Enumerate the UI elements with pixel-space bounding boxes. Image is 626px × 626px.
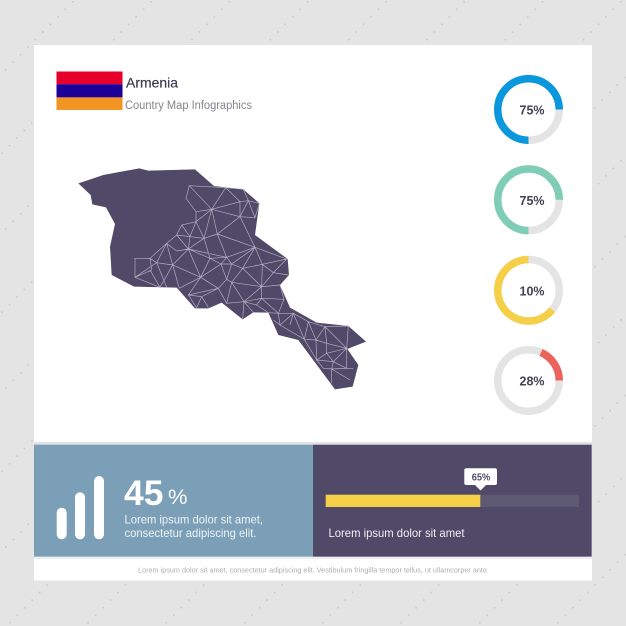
text: blue panel description: Lorem ipsum dolor sit amet,	[124, 512, 263, 526]
panel: white card	[34, 45, 592, 580]
donut: 75% blue	[498, 79, 559, 140]
panel: purple progress	[313, 445, 592, 557]
panel: blue statistic	[34, 445, 313, 557]
donut: 75% blue: 75%	[520, 102, 545, 118]
icon: bar chart	[57, 476, 104, 539]
footer text: Lorem ipsum dolor sit amet, consectetur adipiscing elit. Vestibulum fringilla tempor tellus, ut ullamcorper ante	[138, 565, 487, 574]
subtitle: Country Map Infographics	[125, 100, 252, 112]
text: blue panel description	[124, 512, 263, 540]
callout: 65%	[464, 468, 497, 490]
statistic: 45%: %	[168, 486, 188, 509]
donut: 10% yellow	[498, 260, 559, 321]
donut: 28% red	[498, 350, 559, 411]
donut: 28% red: 28%	[520, 374, 545, 388]
donut: 75% teal: 75%	[520, 193, 545, 208]
donut: 75% teal	[498, 169, 559, 231]
title: Armenia	[126, 74, 178, 90]
donut: 10% yellow: 10%	[520, 283, 545, 298]
callout: 65%: 65%	[472, 472, 490, 484]
statistic: 45%: 45	[124, 474, 164, 513]
flag: Armenia	[56, 72, 122, 110]
progress bar: 65%	[326, 495, 579, 507]
map: Armenia with polygon network	[78, 168, 366, 389]
text: purple panel description: Lorem ipsum dolor sit amet	[328, 526, 465, 540]
text: blue panel description: consectetur adipiscing elit.	[124, 526, 256, 540]
statistic: 45%	[124, 474, 188, 513]
